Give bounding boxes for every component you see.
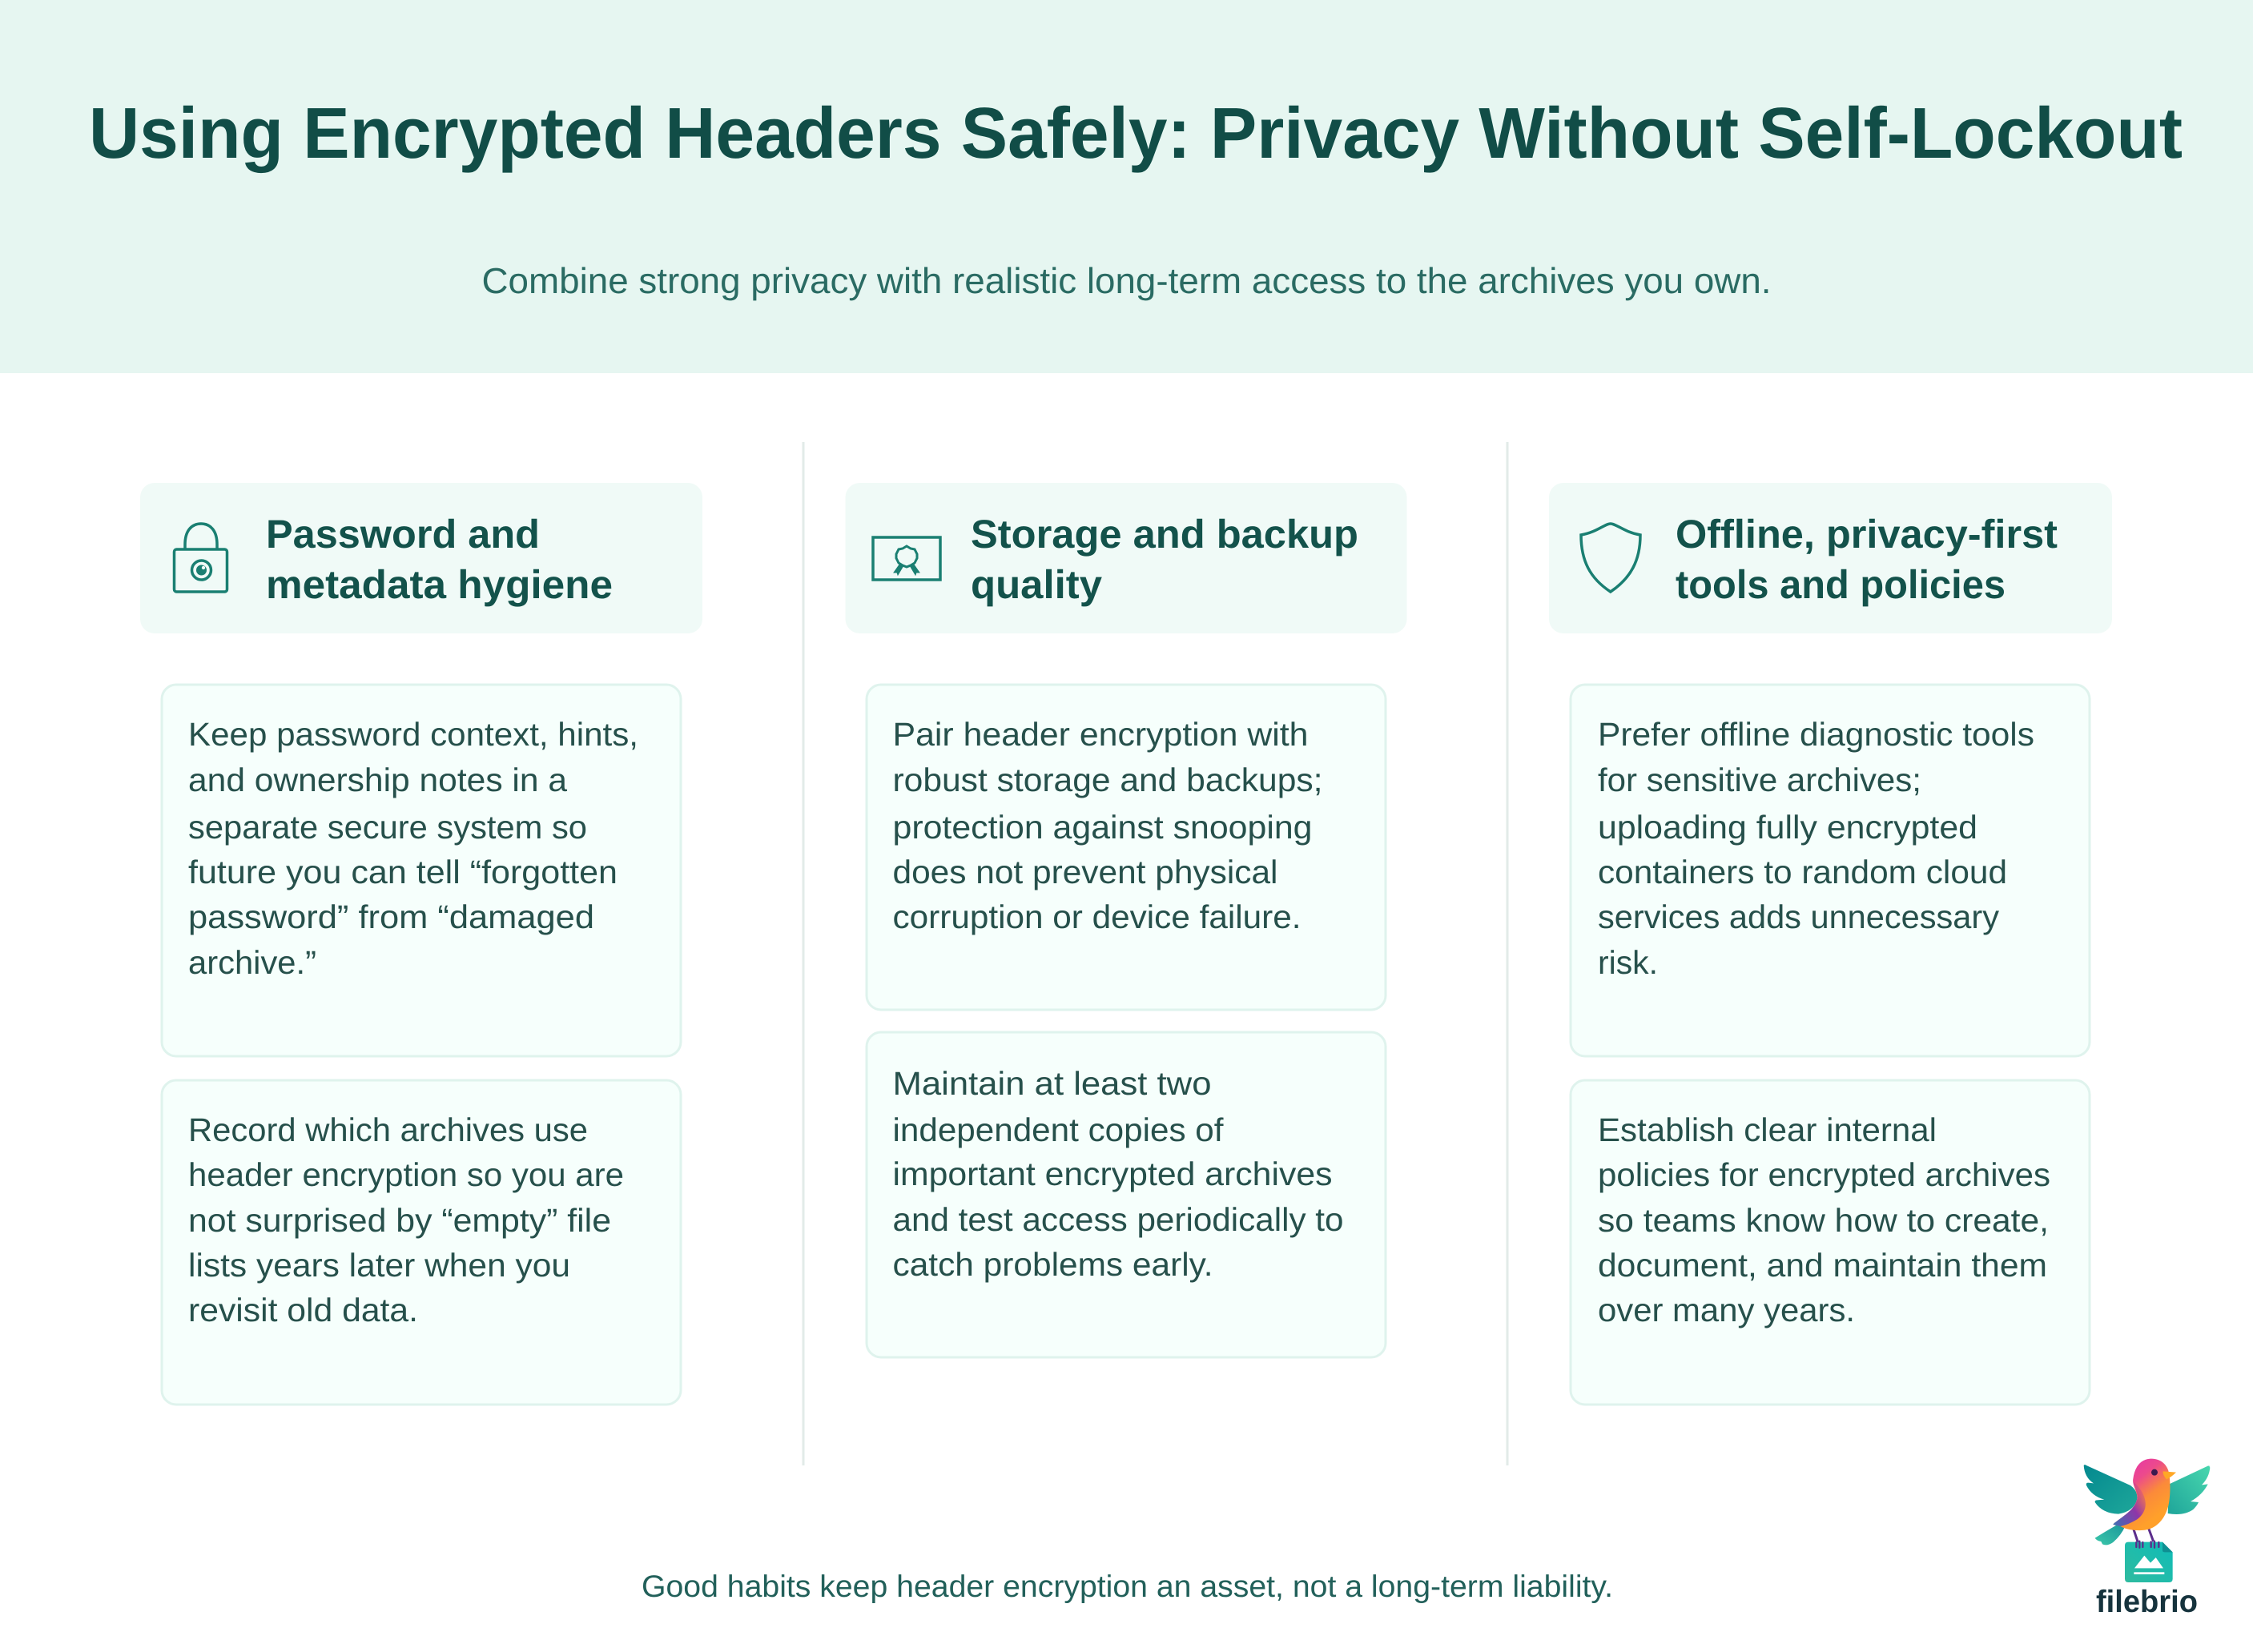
- icon: shield: [1581, 524, 1640, 592]
- card: offline diagnostic tools: uploading fully encrypted: [1598, 809, 1977, 846]
- header band: [0, 0, 2253, 373]
- heading: Password and: [266, 512, 540, 557]
- card: internal policies: [1571, 1080, 2090, 1405]
- card: password context: [162, 685, 681, 1056]
- card: pair header encryption: protection against snooping: [892, 809, 1312, 846]
- column: password and metadata hygiene: [140, 483, 702, 1405]
- column: offline tools and policies: [1549, 483, 2112, 1405]
- column header: [140, 483, 702, 633]
- icon: certificate: [873, 537, 940, 580]
- card: internal policies: so teams know how to create,: [1598, 1202, 2049, 1239]
- card: password context: Keep password context, hints,: [188, 716, 638, 753]
- logo wordmark: filebrio: [2096, 1585, 2198, 1619]
- footer note: Good habits keep header encryption an asset, not a long-term liability.: [642, 1570, 1613, 1604]
- card: offline diagnostic tools: [1571, 685, 2090, 1056]
- subtitle: Combine strong privacy with realistic long-term access to the archives you own.: [482, 260, 1772, 301]
- card: offline diagnostic tools: risk.: [1598, 944, 1658, 981]
- icon: bird on document: [2084, 1459, 2210, 1582]
- card: record header encryption: Record which archives use: [188, 1111, 588, 1148]
- card: two independent copies: Maintain at least two: [892, 1065, 1211, 1102]
- card: internal policies: over many years.: [1598, 1292, 1855, 1328]
- card: two independent copies: important encrypted archives: [892, 1156, 1333, 1192]
- card: pair header encryption: robust storage and backups;: [892, 762, 1323, 798]
- card: internal policies: document, and maintain them: [1598, 1247, 2047, 1284]
- heading: tools and policies: [1676, 562, 2006, 607]
- card: two independent copies: independent copies of: [892, 1111, 1224, 1148]
- heading: quality: [971, 562, 1102, 607]
- card: pair header encryption: [867, 685, 1386, 1010]
- card: offline diagnostic tools: containers to random cloud: [1598, 854, 2007, 890]
- card: internal policies: policies for encrypted archives: [1598, 1156, 2050, 1193]
- card: password context: archive.”: [188, 944, 316, 981]
- logo: filebrio bird: [2084, 1459, 2210, 1619]
- column header: [1549, 483, 2112, 633]
- icon: padlock with eye: [175, 524, 227, 592]
- column: storage and backup quality: [846, 483, 1406, 1357]
- card: two independent copies: and test access periodically to: [892, 1201, 1344, 1238]
- card: pair header encryption: Pair header encryption with: [892, 716, 1309, 753]
- card: record header encryption: not surprised by “empty” file: [188, 1202, 611, 1239]
- card: password context: future you can tell “forgotten: [188, 854, 618, 890]
- card: record header encryption: lists years later when you: [188, 1247, 570, 1284]
- card: record header encryption: header encryption so you are: [188, 1156, 624, 1193]
- card: pair header encryption: corruption or device failure.: [892, 898, 1301, 935]
- card: two independent copies: [867, 1032, 1386, 1357]
- card: pair header encryption: does not prevent physical: [892, 854, 1278, 890]
- column header: [846, 483, 1406, 633]
- heading: metadata hygiene: [266, 562, 613, 607]
- heading: [971, 512, 1358, 607]
- heading: Offline, privacy-first: [1676, 512, 2058, 557]
- title: Using Encrypted Headers Safely: Privacy Without Self-Lockout: [89, 94, 2183, 174]
- card: internal policies: Establish clear internal: [1598, 1111, 1937, 1148]
- card: offline diagnostic tools: services adds unnecessary: [1598, 898, 1999, 935]
- card: two independent copies: catch problems early.: [892, 1246, 1213, 1283]
- card: record header encryption: revisit old data.: [188, 1292, 418, 1328]
- card: password context: separate secure system so: [188, 809, 587, 846]
- card: offline diagnostic tools: for sensitive archives;: [1598, 762, 1921, 798]
- heading: Storage and backup: [971, 512, 1358, 557]
- card: record header encryption: [162, 1080, 681, 1405]
- card: password context: password” from “damaged: [188, 898, 594, 935]
- heading: [1676, 512, 2058, 607]
- heading: [266, 512, 613, 607]
- card: offline diagnostic tools: Prefer offline diagnostic tools: [1598, 716, 2034, 753]
- card: password context: and ownership notes in a: [188, 762, 567, 798]
